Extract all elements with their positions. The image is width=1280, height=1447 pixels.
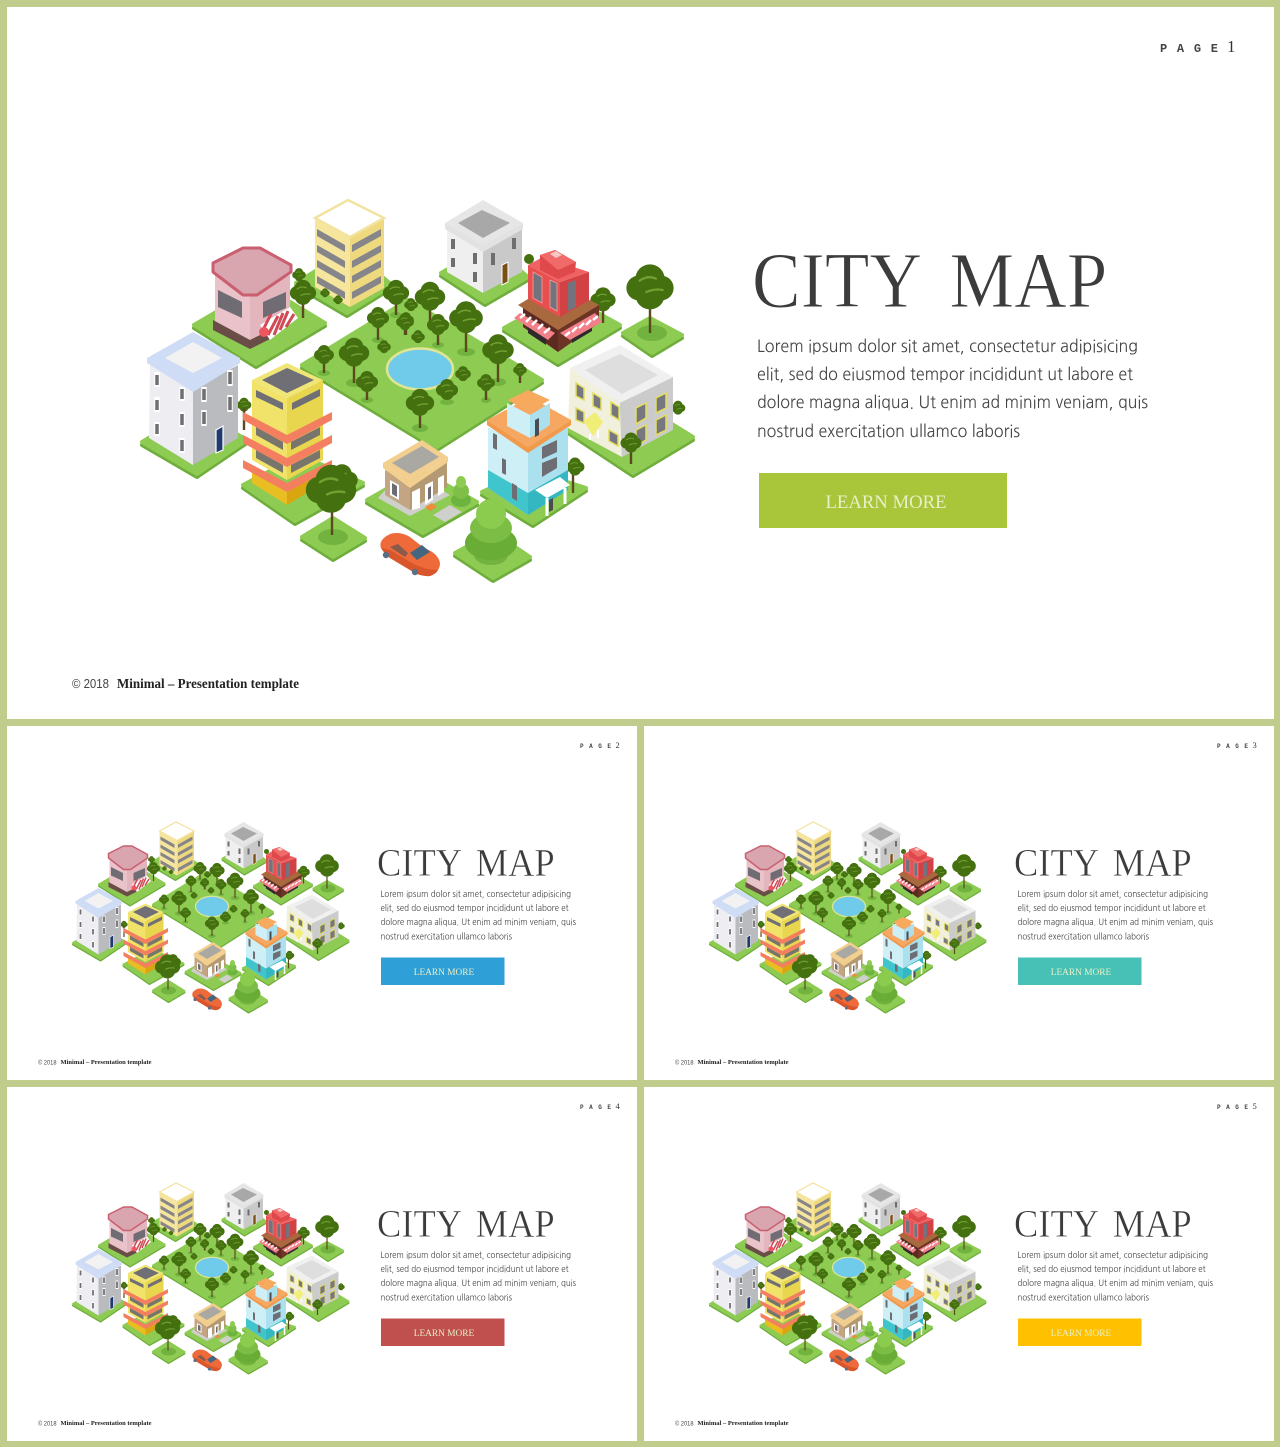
page number [580,1101,620,1111]
big tree on square tile [302,464,365,560]
text block: Lorem ipsum dolor sit amet, consectetur adipisicing [380,890,571,899]
heading: CITY MAP [752,237,1107,325]
illustration: city map [73,1183,348,1374]
text block: Lorem ipsum dolor sit amet, consectetur adipisicing [1018,890,1208,899]
page number: 1 [1227,37,1236,56]
text block: elit, sed do eiusmod tempor incididunt ut labore et [380,1265,569,1274]
footer: © 2018 [675,1058,694,1066]
text block: elit, sed do eiusmod tempor incididunt ut labore et [1018,1265,1206,1274]
footer [38,1420,152,1428]
footer: © 2018 [675,1420,694,1428]
button: LEARN MORE [414,968,474,978]
building: red restaurant [504,250,620,365]
text block: elit, sed do eiusmod tempor incididunt ut labore et [757,366,1134,383]
illustration: city map [710,1183,986,1374]
building: light blue house [482,390,586,526]
tree on square tile right [623,264,682,356]
illustration: city map [710,822,986,1012]
text block [757,338,1148,440]
page number: PAGE [580,743,611,750]
footer: © 2018 [38,1420,57,1428]
footer: Minimal – Presentation template [698,1420,789,1427]
page number: 5 [1252,1101,1257,1111]
park lawn with pond [302,300,542,450]
text block [380,1251,576,1302]
text block: dolore magna aliqua. Ut enim ad minim veniam, quis [1018,918,1213,927]
button [759,473,1007,528]
building: white-blue apartment [142,332,251,477]
page number [1160,37,1236,56]
page number: 2 [616,740,620,750]
page number [1217,740,1257,750]
page number [1217,1101,1257,1111]
heading: CITY MAP [1014,1202,1192,1246]
text block: Lorem ipsum dolor sit amet, consectetur adipisicing [1018,1251,1208,1260]
page number: 3 [1252,740,1257,750]
building: white office with yellow trim [568,345,693,476]
text block: nostrud exercitation ullamco laboris [757,423,1020,440]
panel: page 2 slide [7,726,637,1080]
button [381,1318,504,1346]
text block: nostrud exercitation ullamco laboris [380,932,512,942]
footer: © 2018 [72,676,109,691]
text block: dolore magna aliqua. Ut enim ad minim veniam, quis [1018,1279,1213,1288]
button [381,958,504,985]
page number: PAGE [580,1104,611,1111]
panel: page 4 slide [7,1087,637,1441]
page number: PAGE [1217,1104,1248,1111]
panel: page 3 slide [644,726,1274,1080]
heading: CITY MAP [1014,841,1192,885]
button: LEARN MORE [1051,968,1111,978]
page number [580,740,620,750]
button [1018,1318,1142,1346]
footer: Minimal – Presentation template [698,1059,789,1066]
building: orange and yellow pagoda tower [243,363,363,524]
footer [38,1058,152,1066]
illustration: isometric city map [142,200,693,581]
page number: PAGE [1160,42,1218,56]
building: yellow office tower [296,200,392,316]
slide 4 content [38,1101,620,1428]
slide 5 content [675,1101,1257,1428]
building: grey house [441,200,534,305]
text block [380,890,576,942]
icon: small cone shrub [451,476,471,507]
panel: page 1 slide [7,7,1274,719]
building: pink shop [194,248,343,367]
footer: © 2018 [38,1058,57,1066]
slide 2 content [38,740,620,1066]
text block: nostrud exercitation ullamco laboris [1018,1294,1149,1302]
text block [1018,890,1213,942]
text block: Lorem ipsum dolor sit amet, consectetur adipisicing [757,338,1138,355]
text block: dolore magna aliqua. Ut enim ad minim veniam, quis [380,918,576,927]
trees in the park [314,280,527,432]
text block [1018,1251,1213,1302]
icon: orange car [380,533,440,576]
footer [675,1420,789,1428]
illustration: city map [73,822,348,1012]
button [1018,958,1142,985]
text block: dolore magna aliqua. Ut enim ad minim veniam, quis [380,1279,576,1288]
text block: Lorem ipsum dolor sit amet, consectetur adipisicing [380,1251,571,1260]
text block: nostrud exercitation ullamco laboris [1018,932,1149,942]
text block: elit, sed do eiusmod tempor incididunt ut labore et [380,904,569,913]
page number: PAGE [1217,743,1248,750]
text block: elit, sed do eiusmod tempor incididunt ut labore et [1018,904,1206,913]
button: LEARN MORE [1051,1329,1111,1339]
icon: pond [387,348,453,390]
slide 3 content [675,740,1257,1066]
footer [675,1058,789,1066]
text block: nostrud exercitation ullamco laboris [380,1294,512,1302]
icon: large green shrub on tile [455,499,530,581]
button: LEARN MORE [826,492,946,513]
slide 1 content [72,37,1236,691]
panel: page 5 slide [644,1087,1274,1441]
footer: Minimal – Presentation template [60,1420,152,1427]
building: tan small house [367,440,477,536]
button: LEARN MORE [414,1329,474,1339]
footer: Minimal – Presentation template [60,1059,152,1066]
heading: CITY MAP [377,1202,555,1246]
footer: Minimal – Presentation template [117,676,299,691]
heading: CITY MAP [377,841,555,885]
text block: dolore magna aliqua. Ut enim ad minim veniam, quis [757,394,1148,411]
page number: 4 [616,1101,620,1111]
